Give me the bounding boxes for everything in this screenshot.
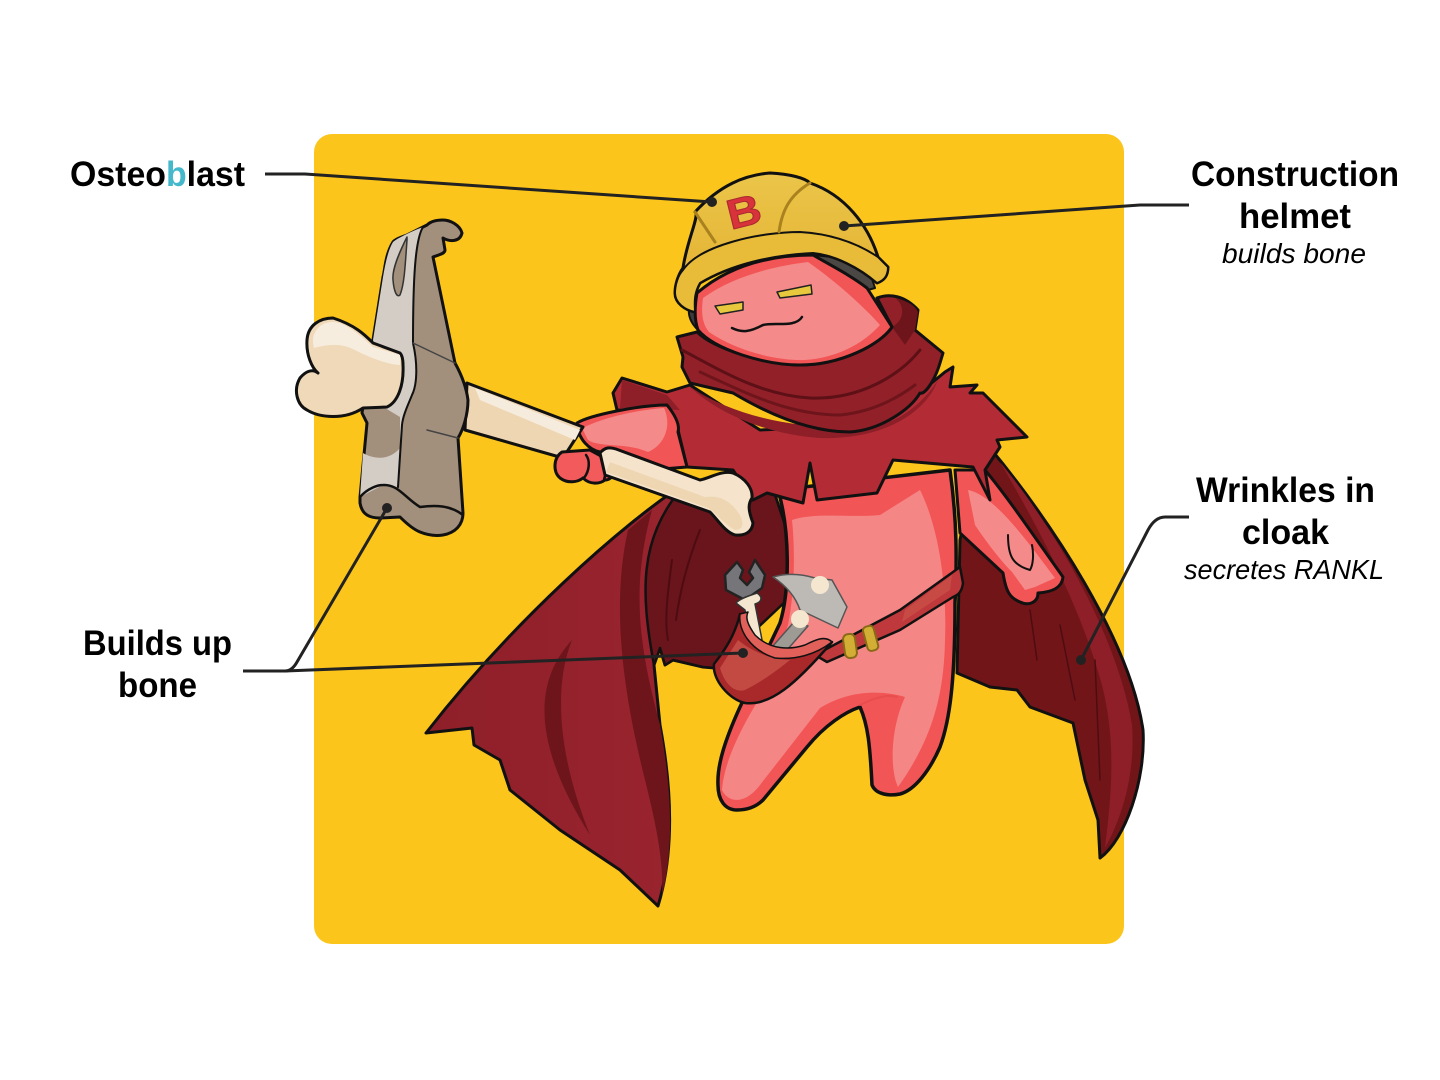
label: Builds up bone: bone (118, 666, 197, 705)
label: Wrinkles in cloak: secretes RANKL (1184, 554, 1384, 585)
left arm (577, 405, 687, 470)
label: Wrinkles in cloak: cloak (1242, 513, 1330, 552)
scarf (677, 296, 943, 432)
mouth (732, 317, 802, 331)
bone knob (296, 318, 403, 416)
cloak right drape (957, 448, 1143, 858)
hand grip fingers (555, 450, 614, 483)
forearm bone (600, 448, 753, 535)
construction helmet (675, 173, 888, 312)
tool belt (815, 567, 963, 662)
bone hammer handle (465, 383, 583, 458)
label: Construction helmet: Construction (1191, 155, 1399, 194)
hammer in pouch (772, 574, 847, 650)
pouch (714, 612, 832, 703)
construction helmet: B (722, 185, 766, 238)
yellow background panel (314, 134, 1124, 944)
label: Wrinkles in cloak (1184, 471, 1384, 585)
leader lines: Builds up bone (243, 503, 748, 671)
label: Osteoblast: Osteoblast (70, 155, 245, 194)
label: Wrinkles in cloak: Wrinkles in (1196, 471, 1375, 510)
upper cloak (613, 367, 1027, 503)
leader line: Construction helmet (839, 205, 1189, 231)
label: Construction helmet (1191, 155, 1399, 269)
eyes (715, 302, 743, 314)
leader line: Wrinkles in cloak (1076, 517, 1189, 665)
leader line: Osteoblast (265, 174, 717, 207)
wrench in pouch (725, 560, 765, 645)
earpiece (689, 255, 875, 330)
cloak left drape (426, 480, 790, 906)
character illustration (296, 173, 1143, 906)
head (695, 255, 892, 365)
label: Construction helmet: helmet (1239, 197, 1351, 236)
label: Construction helmet: builds bone (1222, 238, 1366, 269)
right arm (955, 470, 1063, 604)
body (718, 470, 956, 810)
hammer head (360, 220, 468, 536)
label: Builds up bone: Builds up (83, 624, 232, 663)
label: Builds up bone (83, 624, 232, 705)
